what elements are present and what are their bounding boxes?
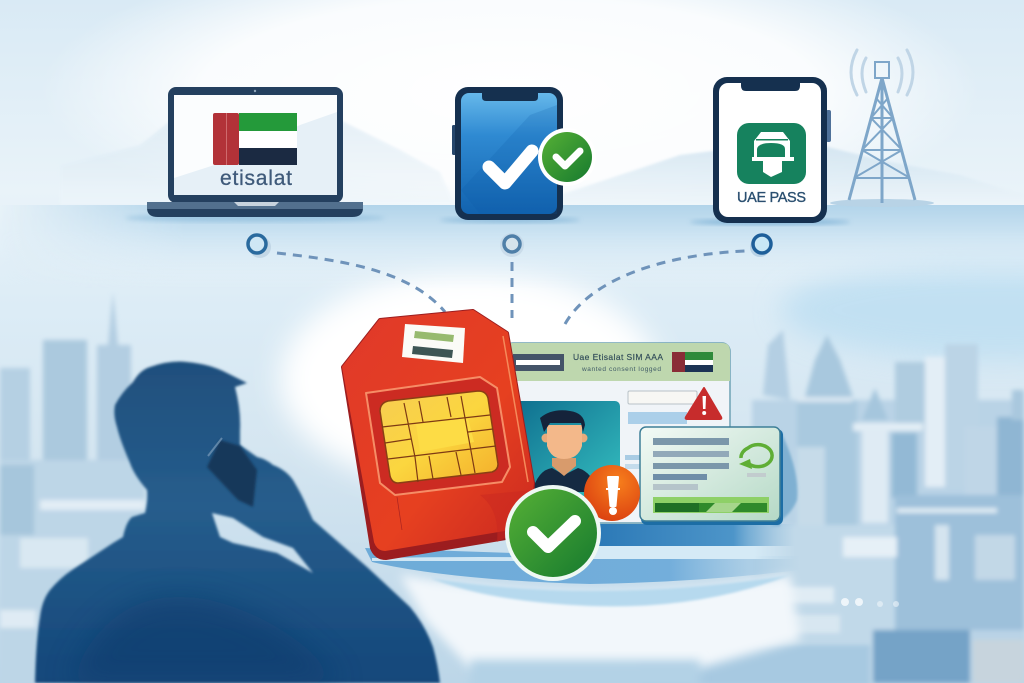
gold chip bbox=[380, 391, 498, 483]
UAE flag on laptop bbox=[213, 113, 297, 165]
horizon band bbox=[28, 205, 1024, 264]
node: UAE Pass bbox=[750, 235, 771, 257]
green refresh icon bbox=[739, 445, 772, 477]
connector: UAE Pass to SIM bbox=[565, 251, 745, 324]
SIM top label bbox=[402, 324, 465, 363]
warning triangle bbox=[686, 388, 721, 419]
lights in city bbox=[841, 598, 899, 607]
shading on back bbox=[70, 597, 340, 683]
connector: phone to SIM bbox=[510, 262, 514, 318]
card title text: Uae Etisalat SIM AAA bbox=[573, 352, 663, 362]
laptop with etisalat screen bbox=[125, 87, 385, 222]
phone with check mark bbox=[440, 87, 596, 223]
card subtitle text: wanted consent logged bbox=[581, 366, 661, 373]
node: phone bbox=[500, 233, 524, 257]
blurred city skyline right bbox=[640, 330, 1024, 683]
large green check badge bbox=[505, 485, 601, 581]
phone at ear bbox=[207, 440, 257, 507]
man on phone silhouette bbox=[35, 362, 440, 683]
small UAE flag bbox=[672, 352, 713, 372]
blurred city skyline left bbox=[0, 292, 145, 683]
progress bar bbox=[653, 497, 769, 513]
UAE Pass app icon bbox=[737, 123, 806, 184]
ID document card bbox=[505, 343, 730, 523]
verification card bbox=[640, 427, 783, 525]
etisalat wordmark: etisalat bbox=[220, 167, 292, 190]
connector: etisalat to SIM bbox=[277, 253, 445, 312]
green check badge bbox=[538, 128, 596, 186]
cell tower with signal waves bbox=[830, 50, 934, 207]
platform under documents bbox=[365, 430, 800, 683]
UAE Pass label: UAE PASS bbox=[737, 190, 806, 206]
node: etisalat bbox=[248, 235, 271, 258]
SIM card bbox=[343, 311, 533, 558]
chip frame bbox=[366, 377, 510, 495]
orange alert badge bbox=[584, 465, 640, 521]
phone with UAE Pass app bbox=[690, 77, 850, 225]
background mountains bbox=[60, 90, 1024, 208]
ID photo with person bbox=[516, 401, 620, 496]
